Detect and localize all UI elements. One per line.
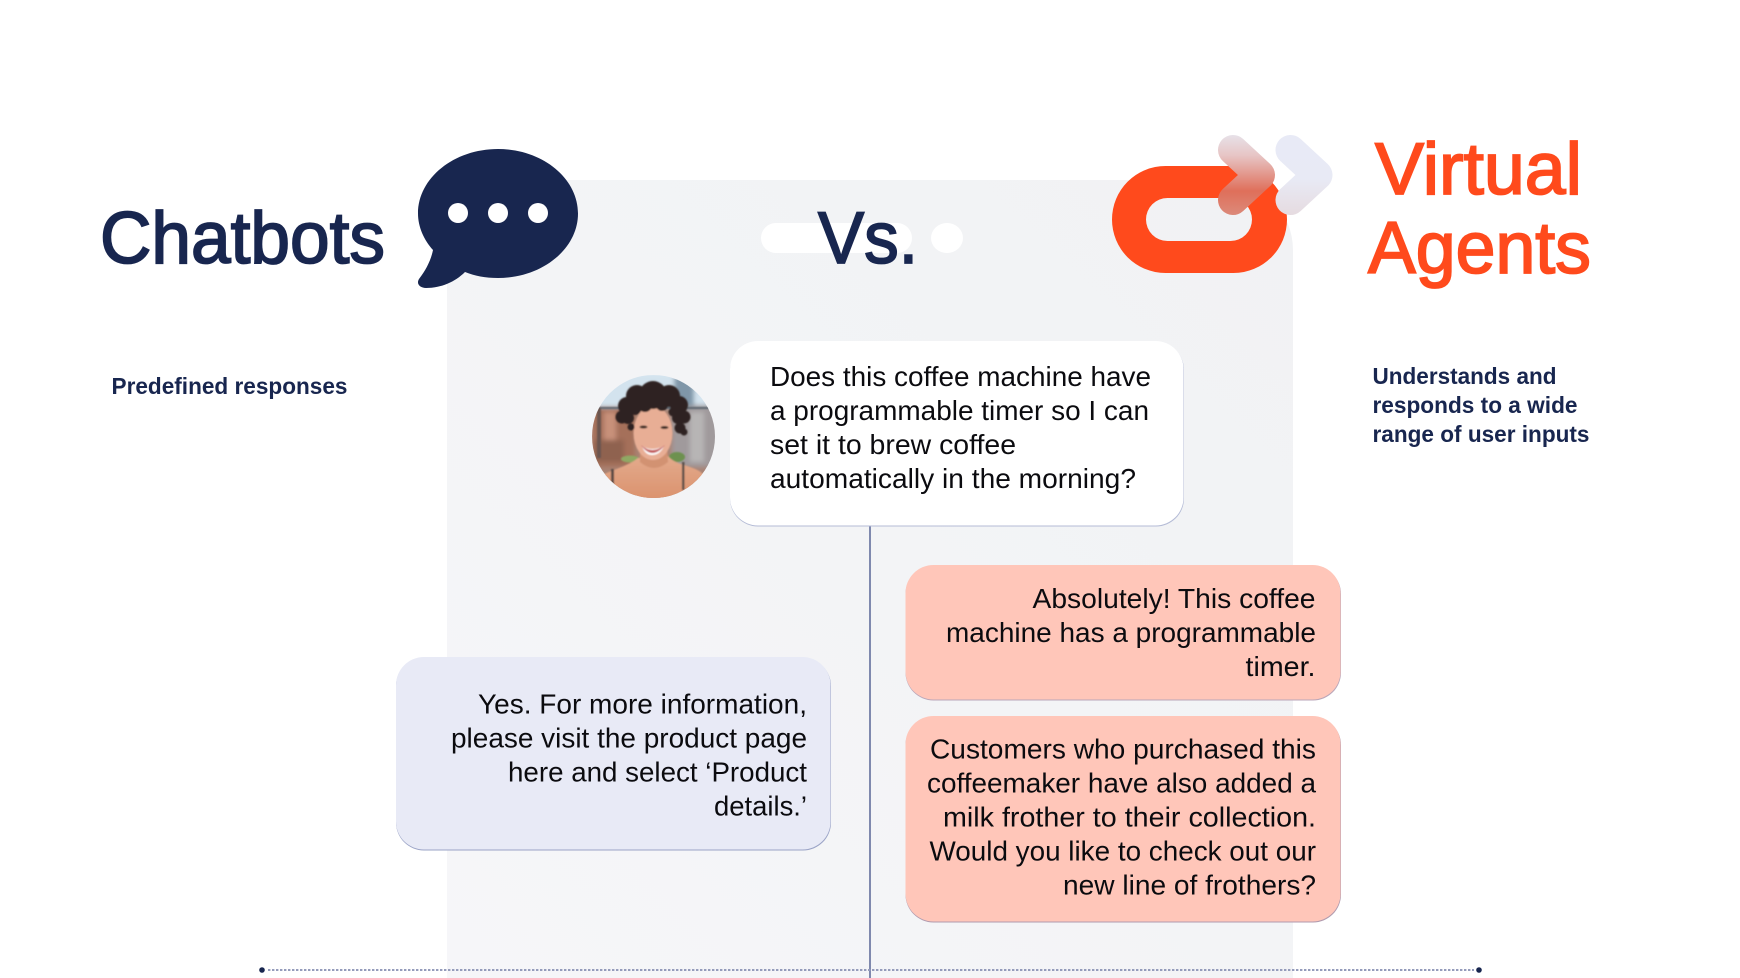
chat bubble: chatbot answer (396, 657, 831, 850)
decorative pill and dot behind Vs. (761, 223, 963, 253)
chevron right (1290, 150, 1318, 200)
icon: virtual agent orange link with chevrons (1112, 150, 1318, 273)
text: Understands and responds to a wide range of user inputs: range of user inputs (1372, 421, 1590, 447)
heading: Virtual Agents: Agents (1368, 208, 1591, 289)
icon: speech bubble with three dots (418, 149, 578, 288)
chat bubble: virtual agent answer 1: machine has a programmable (946, 617, 1316, 648)
hair (616, 381, 690, 436)
avatar: photo of smiling woman (592, 375, 715, 498)
text: Understands and responds to a wide range of user inputs: responds to a wide (1372, 392, 1578, 418)
chat bubble: virtual agent answer 1: Absolutely! This coffee (1032, 583, 1316, 614)
chat bubble: chatbot answer: please visit the product page (451, 722, 807, 754)
heading: Virtual Agents (1368, 129, 1591, 289)
chat bubble: virtual agent answer 1: timer. (1246, 651, 1316, 682)
chat bubble: chatbot answer: Yes. For more information, (478, 688, 807, 720)
chat bubble: user question: automatically in the morning? (770, 463, 1136, 494)
panel: central grey background (447, 180, 1293, 978)
text: Predefined responses: Predefined responses (112, 373, 348, 399)
chat bubble: user question (730, 341, 1184, 526)
chat bubble: chatbot answer: here and select ‘Product (508, 756, 807, 788)
chat bubble: user question: Does this coffee machine have (770, 361, 1151, 392)
chat bubble: virtual agent answer 2: milk frother to their collection. (943, 802, 1316, 832)
chat bubble: chatbot answer: details.’ (714, 790, 807, 822)
timeline: dotted horizontal line with end points (259, 967, 1482, 973)
chat bubble: virtual agent answer 2: Customers who purchased this (930, 734, 1316, 764)
chat bubble: virtual agent answer 2: Would you like to check out our (930, 836, 1316, 866)
orange rounded link (1112, 166, 1287, 273)
text: Understands and responds to a wide range of user inputs (1372, 363, 1590, 447)
chevron left (1233, 150, 1260, 200)
heading: Virtual Agents: Virtual (1375, 129, 1582, 210)
heading: Chatbots: Chatbots (100, 198, 385, 279)
heading: Vs.: Vs. (818, 198, 918, 279)
chat bubble: virtual agent answer 2: new line of frothers? (1063, 870, 1316, 900)
chat bubble: user question: set it to brew coffee (770, 429, 1016, 460)
chat bubble: virtual agent answer 2 (906, 716, 1341, 922)
chat bubble: virtual agent answer 2: coffeemaker have also added a (927, 768, 1317, 798)
text: Understands and responds to a wide range of user inputs: Understands and (1372, 363, 1556, 389)
chat bubble: user question: a programmable timer so I can (770, 395, 1149, 426)
chat bubble: virtual agent answer 1 (906, 565, 1341, 700)
vertical divider line (869, 526, 871, 978)
